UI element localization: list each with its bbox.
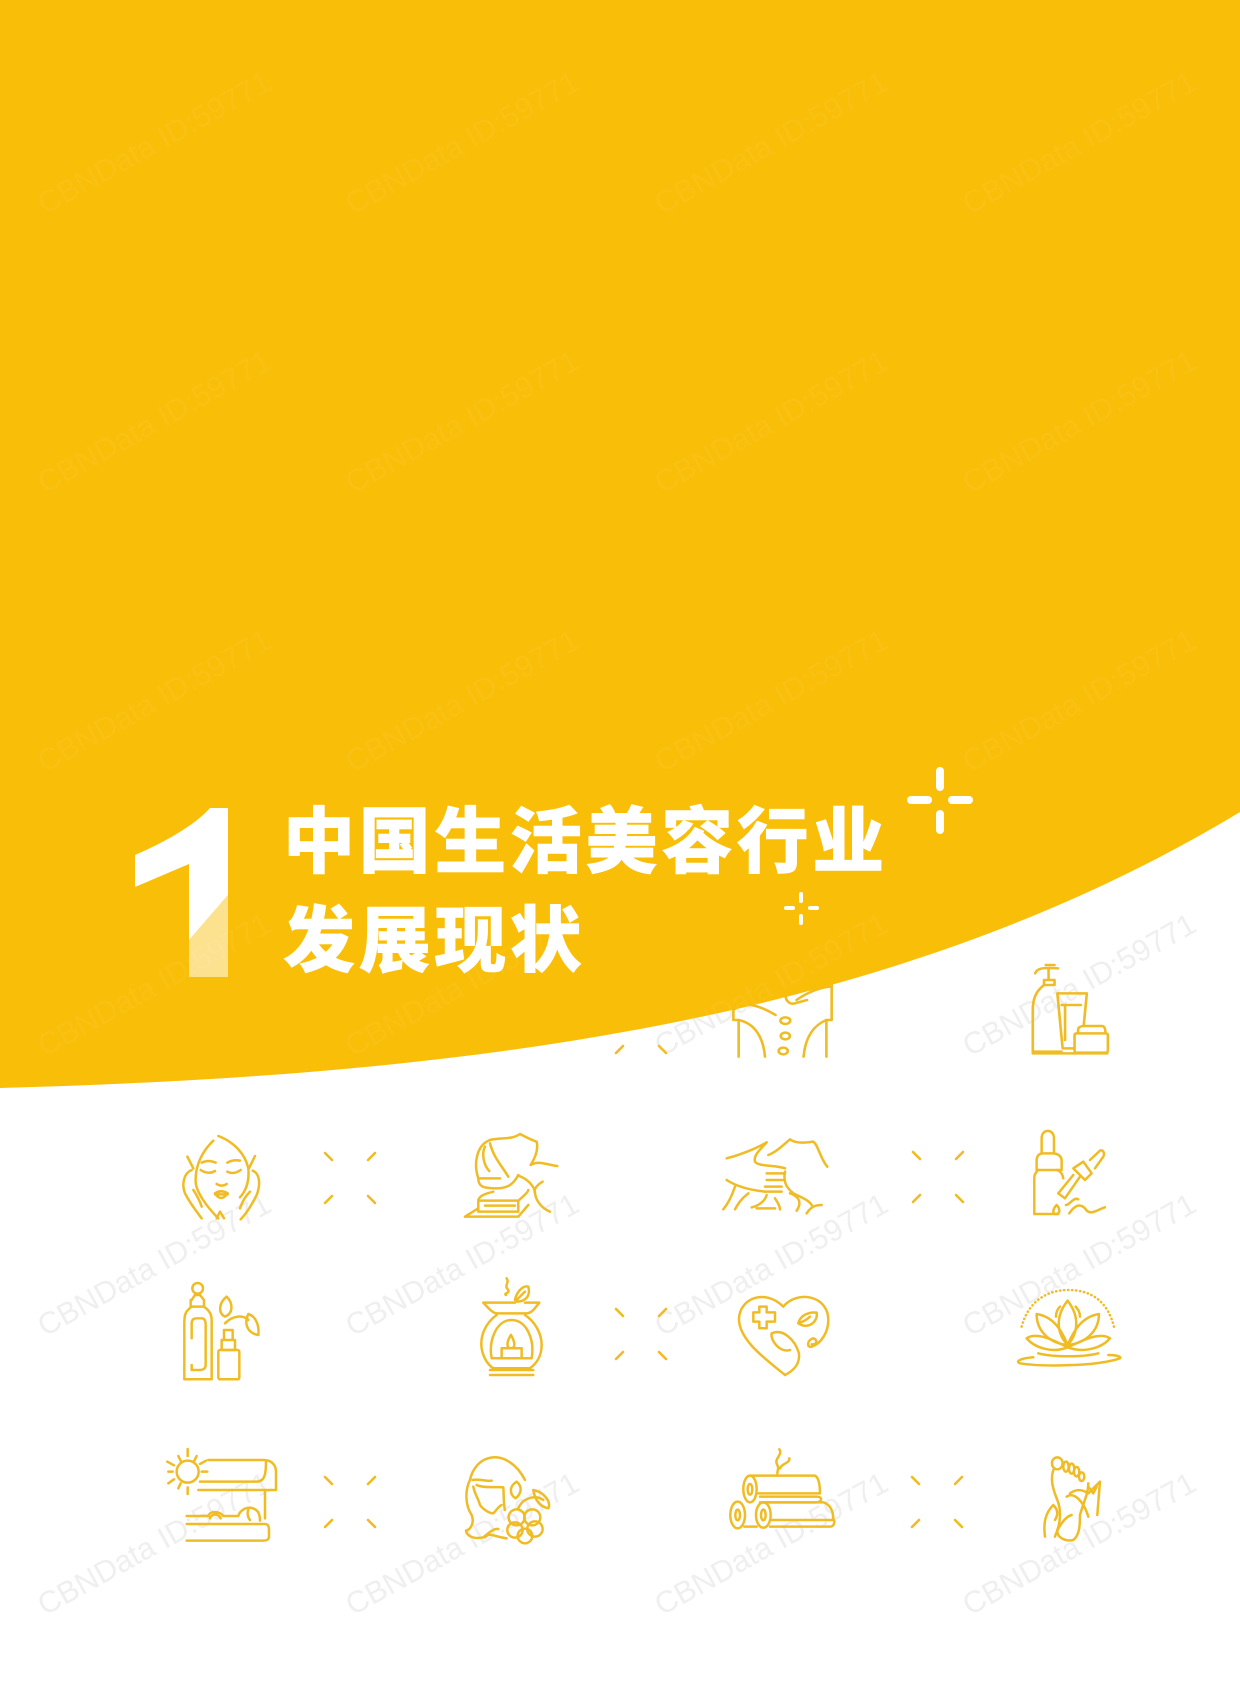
watermarks on white area: CBNData ID:59771: [32, 1187, 277, 1343]
title: 发展现状: [283, 902, 585, 982]
watermarks on white area: CBNData ID:59771: [340, 1466, 585, 1622]
sparkle: large: [907, 767, 973, 834]
icon: facial care: [183, 1136, 259, 1219]
icon: foot massage: [1044, 1457, 1100, 1540]
icon: tanning bed: [167, 1449, 276, 1541]
watermarks on white area: CBNData ID:59771: [649, 907, 894, 1063]
watermarks on yellow banner: CBNData ID:59771: [957, 623, 1202, 779]
watermarks on yellow banner: CBNData ID:59771: [340, 65, 585, 221]
section number 1: [135, 808, 228, 977]
title: [283, 803, 888, 982]
watermarks on yellow banner: CBNData ID:59771: [32, 344, 277, 500]
watermarks on yellow banner: CBNData ID:59771: [32, 907, 277, 1063]
icon: head spa: [465, 1134, 557, 1217]
watermarks on white area: CBNData ID:59771: [957, 1466, 1202, 1622]
watermarks on yellow banner: CBNData ID:59771: [340, 623, 585, 779]
watermarks on white area: CBNData ID:59771: [957, 1187, 1202, 1343]
watermarks on white area: CBNData ID:59771: [649, 1466, 894, 1622]
watermarks on white area: CBNData ID:59771: [340, 1187, 585, 1343]
icon: cosmetic bottles: [1033, 965, 1108, 1053]
decorative tick marks between icons: [325, 1003, 963, 1527]
title: 中国生活美容行业: [283, 803, 888, 883]
watermarks on white area: CBNData ID:59771: [340, 907, 585, 1063]
watermarks on yellow banner: CBNData ID:59771: [957, 344, 1202, 500]
watermarks on white area: CBNData ID:59771: [957, 907, 1202, 1063]
watermarks on yellow banner: [32, 65, 1202, 1063]
watermarks on yellow banner: CBNData ID:59771: [649, 344, 894, 500]
watermarks on white area: CBNData ID:59771: [649, 1187, 894, 1343]
icon: neck massage: [723, 1139, 827, 1213]
icon: hair and flower: [466, 1457, 549, 1543]
watermarks on yellow banner: CBNData ID:59771: [32, 623, 277, 779]
watermarks on white area: CBNData ID:59771: [32, 1466, 277, 1622]
watermarks on yellow banner: CBNData ID:59771: [957, 65, 1202, 221]
watermarks on yellow banner: CBNData ID:59771: [32, 65, 277, 221]
watermarks on white area: CBNData ID:59771: [32, 907, 277, 1063]
icon: back massage: [733, 983, 832, 1057]
watermarks on yellow banner: CBNData ID:59771: [649, 65, 894, 221]
yellow curved banner: [0, 0, 1240, 1088]
icon: aroma burner: [481, 1278, 542, 1375]
watermarks on yellow banner: CBNData ID:59771: [649, 623, 894, 779]
icon: lotus: [1018, 1290, 1120, 1365]
watermarks on yellow banner: CBNData ID:59771: [649, 907, 894, 1063]
watermarks on yellow banner: CBNData ID:59771: [340, 344, 585, 500]
icon: essential oil bottles: [184, 1283, 259, 1379]
icon: hot stone logs: [730, 1449, 834, 1528]
sparkle: small: [784, 892, 819, 925]
watermarks on yellow banner: CBNData ID:59771: [340, 907, 585, 1063]
watermarks on white area: [32, 907, 1202, 1622]
icon: heart with cross and leaves: [739, 1297, 828, 1375]
icon: serum dropper: [1034, 1131, 1105, 1214]
